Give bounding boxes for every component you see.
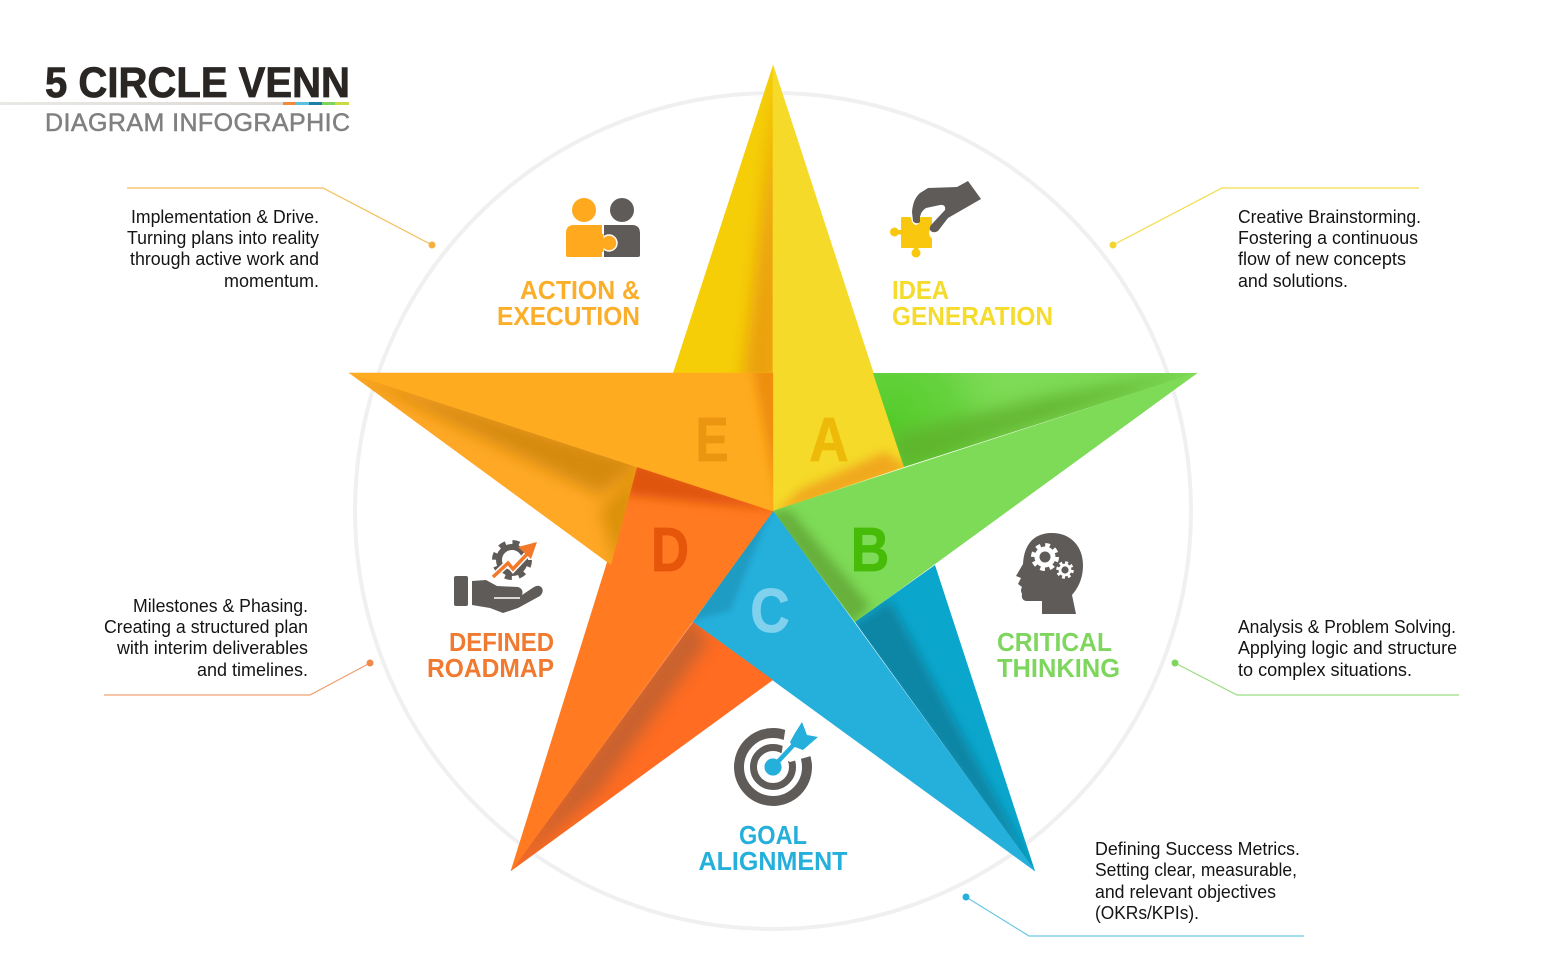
- callout: milestones and phasing: [104, 596, 374, 695]
- callout: analysis and problem solving: Applying logic and structure: [1238, 638, 1457, 658]
- title rule: [0, 102, 349, 105]
- callout: implementation and drive: [127, 188, 436, 291]
- heading: action and execution: [497, 277, 640, 331]
- heading: defined roadmap: ROADMAP: [427, 655, 554, 683]
- callout: milestones and phasing: and timelines.: [197, 660, 308, 680]
- background circle: [355, 93, 1191, 929]
- heading: goal alignment: [698, 822, 848, 876]
- heading: goal alignment: ALIGNMENT: [698, 848, 848, 876]
- callout: implementation and drive: momentum.: [224, 271, 319, 291]
- icon: hand placing puzzle piece: [891, 181, 981, 256]
- star segment D: orange: [505, 460, 780, 875]
- letter A: A: [809, 406, 849, 475]
- star segment B: green: [768, 370, 1197, 626]
- letter C: C: [750, 577, 790, 646]
- icon: hand with gear and growth arrow: [454, 542, 543, 613]
- letter E: E: [695, 405, 729, 474]
- heading: critical thinking: CRITICAL: [997, 629, 1112, 657]
- callout: defining success metrics: and relevant objectives: [1095, 882, 1276, 902]
- star diagram: [349, 65, 1197, 880]
- callout: analysis and problem solving: to complex situations.: [1238, 660, 1412, 680]
- star segment E: amber: [349, 365, 780, 575]
- callout: defining success metrics: [962, 839, 1304, 936]
- heading: idea generation: IDEA: [892, 277, 949, 305]
- callout: defining success metrics: Setting clear, measurable,: [1095, 860, 1297, 880]
- heading: critical thinking: THINKING: [997, 655, 1120, 683]
- subtitle: DIAGRAM INFOGRAPHIC: [45, 109, 350, 137]
- callout: milestones and phasing: Milestones & Phasing.: [133, 596, 308, 616]
- heading: goal alignment: GOAL: [739, 822, 807, 850]
- callout: implementation and drive: through active work and: [130, 249, 319, 269]
- callout: creative brainstorming: and solutions.: [1238, 271, 1348, 291]
- callout: creative brainstorming: flow of new concepts: [1238, 249, 1406, 269]
- letter B: B: [851, 516, 889, 585]
- heading: defined roadmap: DEFINED: [449, 629, 554, 657]
- callout: milestones and phasing: with interim deliverables: [116, 638, 308, 658]
- heading: defined roadmap: [427, 629, 554, 683]
- icon: head with gears: [1016, 533, 1083, 614]
- title block: [0, 59, 350, 137]
- callout: implementation and drive: Implementation & Drive.: [131, 207, 319, 227]
- icon: target with arrow: [739, 722, 825, 801]
- callout: creative brainstorming: Creative Brainstorming.: [1238, 207, 1421, 227]
- callout: creative brainstorming: [1110, 188, 1421, 291]
- callout: defining success metrics: (OKRs/KPIs).: [1095, 903, 1199, 923]
- icon: teamwork people: [566, 198, 640, 257]
- callout: creative brainstorming: Fostering a continuous: [1238, 228, 1418, 248]
- callout: analysis and problem solving: Analysis & Problem Solving.: [1238, 617, 1456, 637]
- callout: implementation and drive: Turning plans into reality: [127, 228, 319, 248]
- letter D: D: [651, 516, 689, 585]
- callout: milestones and phasing: Creating a structured plan: [104, 617, 308, 637]
- heading: action and execution: EXECUTION: [497, 303, 640, 331]
- heading: idea generation: [892, 277, 1053, 331]
- callout: analysis and problem solving: [1172, 617, 1459, 695]
- heading: action and execution: ACTION &: [520, 277, 640, 305]
- heading: critical thinking: [997, 629, 1120, 683]
- star segment A: yellow: [673, 65, 912, 516]
- callout: defining success metrics: Defining Success Metrics.: [1095, 839, 1300, 859]
- title: 5 circle venn: 5 CIRCLE VENN: [45, 59, 350, 107]
- star segment C: blue: [688, 505, 1040, 880]
- heading: idea generation: GENERATION: [892, 303, 1053, 331]
